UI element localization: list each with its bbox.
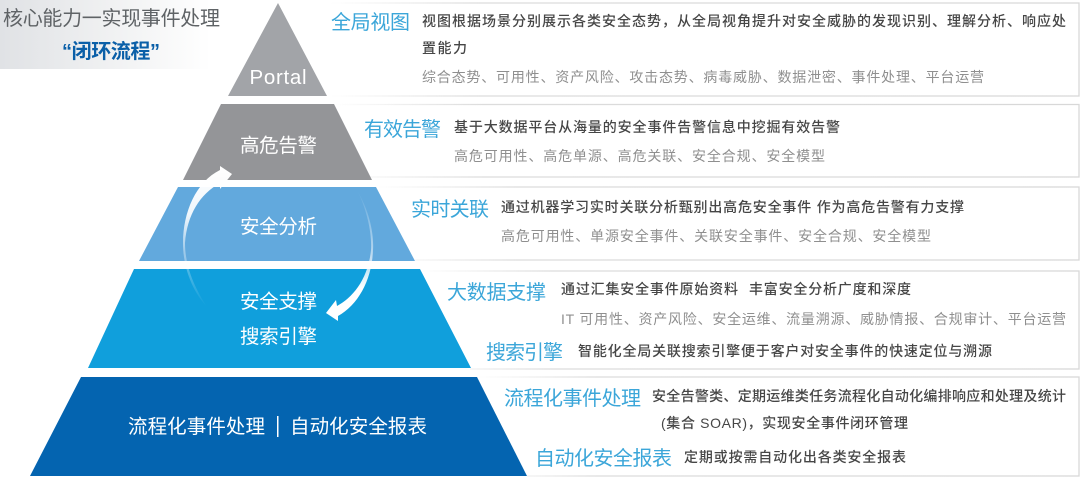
panel: 全局视图: 置能力 xyxy=(422,40,467,56)
panel: 流程化事件处理 与 自动化安全报表 xyxy=(477,377,1079,476)
panel: 流程化事件处理 与 自动化安全报表: 安全告警类、定期运维类任务流程化自动化编排响应和处理及统计 xyxy=(652,388,1066,404)
pyramid tier: 安全支撑 搜索引擎 xyxy=(88,269,471,368)
title block: 核心能力一实现事件处理 xyxy=(3,7,220,30)
pyramid tier: 安全分析: 安全分析 xyxy=(240,216,317,238)
panel: 大数据支撑 与 搜索引擎: 智能化全局关联搜索引擎便于客户对安全事件的快速定位与溯源 xyxy=(578,343,992,359)
pyramid tier: 高危告警 xyxy=(183,104,372,180)
panel: 大数据支撑 与 搜索引擎: 大数据支撑 xyxy=(447,281,546,304)
panel: 有效告警: 有效告警 xyxy=(364,118,441,141)
panel: 全局视图: 综合态势、可用性、资产风险、攻击态势、病毒威胁、数据泄密、事件处理、平台运营 xyxy=(422,69,984,85)
title block: “闭环流程” xyxy=(62,40,160,63)
pyramid tier: 流程化事件处理 自动化安全报表: 自动化安全报表 xyxy=(290,416,427,438)
panel: 流程化事件处理 与 自动化安全报表: 自动化安全报表 xyxy=(535,447,672,470)
pyramid tier: 安全分析 xyxy=(139,187,415,261)
panel: 全局视图 xyxy=(330,3,1079,96)
panel: 有效告警: 基于大数据平台从海量的安全事件告警信息中挖掘有效告警 xyxy=(454,119,840,135)
pyramid tier: 流程化事件处理 自动化安全报表 xyxy=(30,377,527,476)
panel: 有效告警 xyxy=(334,104,1079,177)
pyramid tier: Portal xyxy=(228,3,327,96)
panel: 实时关联: 通过机器学习实时关联分析甄别出高危安全事件 作为高危告警有力支撑 xyxy=(501,199,964,215)
pyramid tier: 安全支撑 搜索引擎: 安全支撑 xyxy=(240,291,317,313)
panel: 实时关联: 实时关联 xyxy=(411,198,489,221)
panel: 实时关联 xyxy=(376,187,1079,260)
panel: 大数据支撑 与 搜索引擎: IT 可用性、资产风险、安全运维、流量溯源、威胁情报、合规审计、平台运营 xyxy=(561,311,1066,327)
panel: 大数据支撑 与 搜索引擎: 搜索引擎 xyxy=(486,341,563,364)
panel: 大数据支撑 与 搜索引擎: 通过汇集安全事件原始资料 xyxy=(561,281,738,297)
panel: 流程化事件处理 与 自动化安全报表: (集合 SOAR)，实现安全事件闭环管理 xyxy=(661,415,908,431)
panel: 流程化事件处理 与 自动化安全报表: 流程化事件处理 xyxy=(504,387,641,410)
panel: 流程化事件处理 与 自动化安全报表: 定期或按需自动化出各类安全报表 xyxy=(684,449,906,465)
panel: 实时关联: 高危可用性、单源安全事件、关联安全事件、安全合规、安全模型 xyxy=(501,228,931,244)
panel: 全局视图: 全局视图 xyxy=(331,11,410,34)
panel: 全局视图: 视图根据场景分别展示各类安全态势，从全局视角提升对安全威胁的发现识别、理解分析、响应处 xyxy=(422,13,1066,29)
title block xyxy=(0,0,222,69)
pyramid tier: 流程化事件处理 自动化安全报表: 流程化事件处理 xyxy=(128,416,265,438)
pyramid tier: 高危告警: 高危告警 xyxy=(240,135,317,157)
arrow: upward cycle arrow on left xyxy=(183,166,232,307)
pyramid tier: Portal: Portal xyxy=(250,66,306,89)
pyramid tier: 安全支撑 搜索引擎: 搜索引擎 xyxy=(240,326,317,348)
panel: 有效告警: 高危可用性、高危单源、高危关联、安全合规、安全模型 xyxy=(454,148,825,164)
panel: 大数据支撑 与 搜索引擎: 丰富安全分析广度和深度 xyxy=(749,281,911,297)
panel: 大数据支撑 与 搜索引擎 xyxy=(420,271,1079,369)
arrow: downward cycle arrow on right xyxy=(326,190,373,321)
